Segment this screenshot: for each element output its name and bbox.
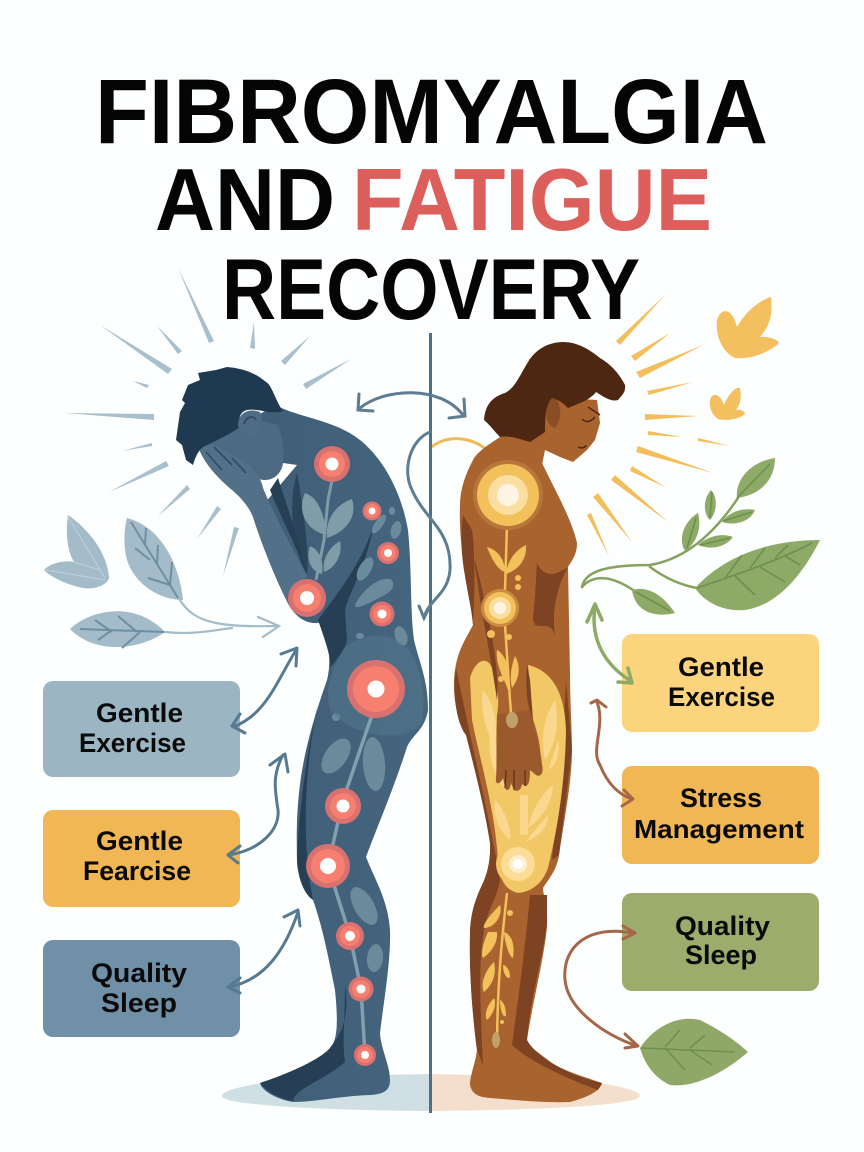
ground shadow: [222, 1074, 640, 1111]
panel: right gentle exercise: Gentle: [678, 652, 764, 682]
sun joints: [473, 460, 543, 886]
panel: right gentle exercise: [622, 634, 819, 732]
panel: right gentle exercise: Exercise: [668, 682, 775, 712]
left hair: [176, 367, 283, 465]
left ear: [238, 411, 262, 438]
arrows: left connectors: [228, 648, 300, 993]
panel: left gentle exercise: Exercise: [79, 728, 186, 758]
right head: [500, 397, 600, 465]
yellow thigh: [470, 661, 566, 893]
right hand: [496, 710, 543, 791]
pain rays: [65, 268, 351, 576]
right arm: [475, 466, 540, 760]
centre divider: [429, 333, 432, 1113]
title: AND: [155, 150, 335, 249]
panel: left gentle fearcise: Gentle: [96, 826, 183, 856]
panel: right quality sleep: Quality: [675, 911, 770, 941]
panel: right stress management: Management: [634, 814, 804, 844]
green branch: [582, 458, 820, 615]
body shadow: [318, 528, 373, 668]
right arm plant: [487, 525, 526, 728]
panel: left gentle fearcise: [43, 810, 240, 907]
panel: left quality sleep: Quality: [91, 958, 187, 988]
left leaves: [44, 515, 279, 648]
left body: [250, 405, 428, 1102]
panel: left gentle exercise: [43, 681, 240, 777]
body ovals: [316, 507, 410, 973]
pain points: [288, 446, 405, 1066]
sunshine rays: [587, 295, 730, 556]
panel: right stress management: Stress: [680, 783, 762, 813]
right body: [454, 437, 602, 1102]
yellow arc: [430, 439, 492, 454]
panel: right quality sleep: Sleep: [685, 940, 757, 970]
panel: left quality sleep: [43, 940, 240, 1037]
title: [95, 61, 768, 338]
right hair: [484, 342, 625, 442]
leaf: bottom right: [640, 1019, 748, 1085]
panel: right stress management: [622, 766, 819, 864]
right body shading: [462, 515, 568, 670]
title: FATIGUE: [352, 150, 712, 249]
right figure: [454, 342, 625, 1102]
panel: right quality sleep: [622, 893, 819, 991]
left forearm and hand: [199, 444, 307, 607]
eye and mouth: [578, 407, 600, 448]
left figure: [176, 367, 428, 1102]
yellow leaves: [710, 297, 779, 420]
arrow: green connector: [587, 604, 632, 683]
centre arrows: [358, 393, 465, 618]
shin plant: [482, 893, 514, 1048]
left face: [203, 418, 283, 480]
arrows: brown connectors: [565, 700, 638, 1048]
panel: left gentle fearcise: Fearcise: [83, 856, 191, 886]
panel: left gentle exercise: Gentle: [96, 698, 183, 728]
title: FIBROMYALGIA: [95, 61, 768, 163]
nerve line: [328, 715, 372, 1055]
plant on arm: [302, 480, 353, 580]
panel: left quality sleep: Sleep: [101, 988, 177, 1018]
title: RECOVERY: [222, 242, 640, 338]
